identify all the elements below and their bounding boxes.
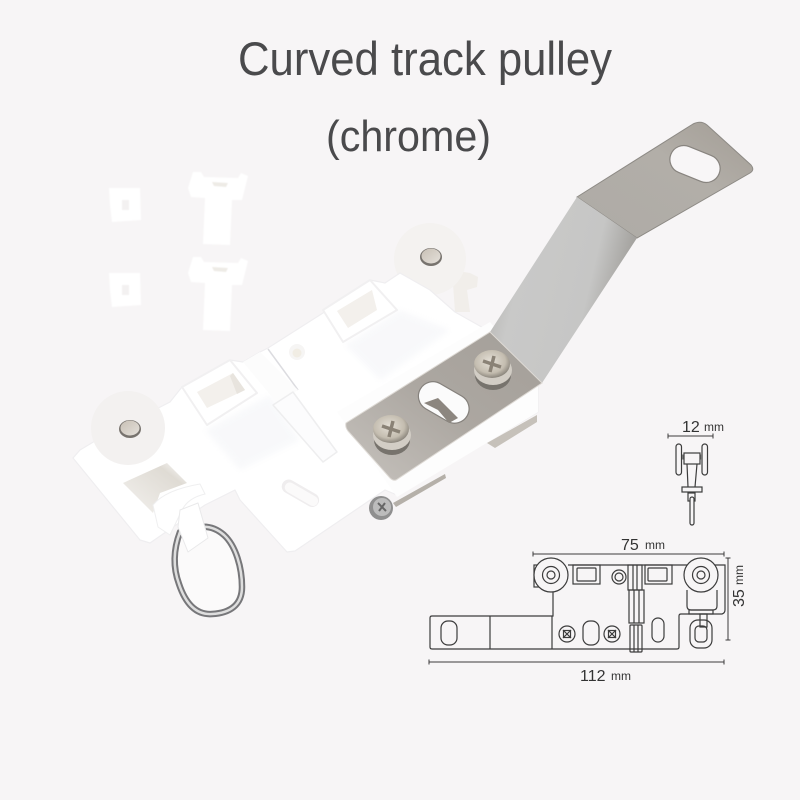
metal ring [175, 527, 242, 614]
35 mm label: 35 [731, 589, 748, 607]
bracket slanted arm [490, 197, 637, 383]
bar screws [559, 626, 620, 642]
35 mm dimension line [726, 558, 730, 640]
white plastic body [73, 273, 538, 552]
112 mm label: 112 [580, 668, 606, 685]
left window [123, 463, 187, 513]
square block lower [182, 360, 257, 425]
bar slots [441, 618, 664, 645]
75 mm dimension line [533, 552, 724, 556]
mm unit: mm [704, 420, 724, 434]
front view diagram [429, 537, 748, 685]
side view wheels [676, 444, 708, 475]
pulley product photo [73, 122, 753, 614]
right wheel [394, 223, 478, 312]
side view carriage [682, 453, 702, 525]
bracket mounting plate [346, 332, 542, 480]
12 mm label: 12 [682, 419, 700, 436]
body outline [430, 565, 725, 649]
bar dividers [490, 616, 552, 649]
right roller [684, 558, 718, 592]
left tab [534, 565, 540, 587]
bracket plate slot [413, 376, 474, 428]
white mounting under plate [337, 322, 538, 497]
swivel mount [153, 484, 208, 552]
35 mm unit: mm [732, 565, 746, 585]
square block upper [323, 280, 397, 342]
bracket top arm [577, 122, 753, 238]
body slot [279, 477, 322, 510]
screw hole [289, 344, 305, 360]
hinge strips [243, 349, 337, 462]
small clip lower [109, 273, 141, 307]
small clip upper [109, 188, 141, 222]
small clip parts [109, 172, 248, 331]
rivet [612, 570, 626, 584]
subtitle: (chrome) [326, 112, 491, 161]
upper screw [474, 350, 512, 390]
chrome bracket [346, 122, 753, 480]
T clip lower [188, 257, 248, 331]
75 mm unit: mm [645, 538, 665, 552]
112 mm unit: mm [611, 669, 631, 683]
square windows [573, 565, 672, 584]
body soft shading [205, 310, 450, 470]
75 mm label: 75 [621, 537, 639, 554]
112 mm dimension line [429, 660, 724, 664]
bracket top slot [666, 141, 724, 187]
grey shadow parts below plate [487, 415, 537, 448]
left wheel [91, 391, 165, 465]
12 mm dimension line [668, 434, 713, 438]
side view diagram [668, 419, 724, 525]
lower screw [373, 415, 411, 455]
T clip upper [188, 172, 248, 245]
carriage and ring [687, 590, 717, 648]
title: Curved track pulley [238, 32, 612, 85]
hinge barrel [628, 565, 644, 652]
small side screw [369, 474, 446, 520]
left roller [534, 558, 568, 592]
